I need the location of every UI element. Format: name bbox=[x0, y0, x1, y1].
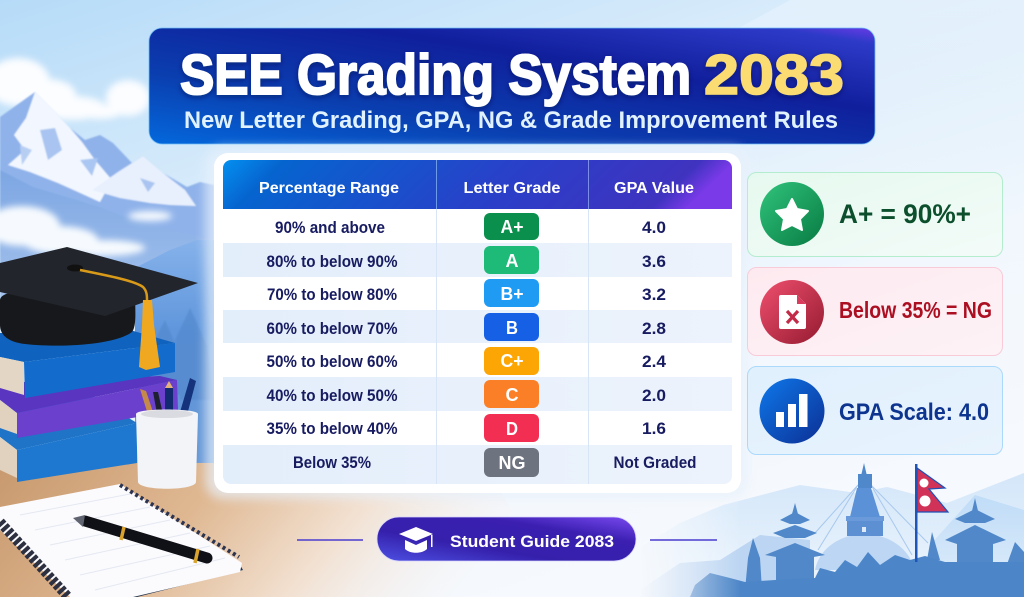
row: A+: 90% and above bbox=[275, 219, 385, 237]
row: B+ bbox=[267, 279, 666, 307]
title banner bbox=[149, 28, 875, 144]
callout: NG bbox=[748, 268, 1002, 356]
row: B: 60% to below 70% bbox=[266, 320, 398, 338]
icon: graduation cap bbox=[399, 527, 433, 553]
right pagoda bbox=[928, 498, 1024, 562]
row: A: A bbox=[506, 251, 518, 271]
row: A bbox=[266, 246, 666, 274]
row: A: 80% to below 90% bbox=[266, 253, 398, 271]
footer badge: Student Guide: Student Guide 2083 bbox=[450, 532, 614, 551]
callout: A+: A+ = 90%+ bbox=[839, 199, 971, 229]
table header: Letter Grade bbox=[464, 180, 561, 197]
row: C+: 50% to below 60% bbox=[266, 353, 398, 371]
row: C+: 2.4 bbox=[642, 353, 667, 371]
book: middle purple bbox=[0, 376, 178, 438]
icon: failed document bbox=[760, 280, 824, 344]
row: NG bbox=[293, 448, 696, 477]
row: NG: Below 35% bbox=[293, 454, 371, 472]
row: C+ bbox=[266, 347, 667, 375]
callout: GPA scale bbox=[748, 366, 1002, 454]
background light diagonal bbox=[735, 0, 1024, 200]
book: bottom blue bbox=[0, 395, 137, 482]
notebook and pen bbox=[0, 484, 243, 597]
row: C: 2.0 bbox=[642, 387, 666, 405]
icon: bar chart bbox=[760, 378, 824, 444]
row: D: 1.6 bbox=[642, 420, 666, 438]
row: A+: A+ bbox=[500, 217, 524, 237]
row: B+: 3.2 bbox=[642, 286, 666, 304]
row: C bbox=[266, 380, 666, 408]
scene: himalayan mountains and clouds bbox=[0, 58, 214, 470]
row: C: C bbox=[506, 385, 518, 405]
left pagoda bbox=[746, 503, 825, 582]
row: A+ bbox=[275, 213, 666, 240]
table header bbox=[223, 160, 732, 209]
icon: star bbox=[760, 182, 824, 246]
row: B+: 70% to below 80% bbox=[267, 286, 397, 304]
row: D: 35% to below 40% bbox=[266, 420, 398, 438]
row: A: 3.6 bbox=[642, 253, 666, 271]
spiral binding bbox=[120, 485, 239, 557]
row: C: 40% to below 50% bbox=[266, 387, 398, 405]
row: D: D bbox=[506, 419, 518, 439]
callout: GPA scale: GPA Scale: 4.0 bbox=[839, 399, 989, 426]
stack of books bbox=[0, 330, 178, 482]
table header: GPA Value bbox=[614, 180, 694, 197]
wooden desk bbox=[0, 462, 560, 597]
graduation cap bbox=[0, 247, 198, 370]
pencil cup bbox=[136, 378, 198, 489]
table header: Percentage Range bbox=[259, 180, 399, 197]
panel: grading table bbox=[205, 147, 749, 499]
title: SEE Grading System bbox=[180, 43, 691, 107]
row: C+: C+ bbox=[500, 351, 524, 371]
row: NG: NG bbox=[498, 453, 526, 473]
footer badge: Student Guide bbox=[297, 517, 717, 561]
pen bbox=[73, 515, 207, 563]
row: B bbox=[266, 313, 666, 341]
callout: NG: Below 35% = NG bbox=[839, 297, 992, 323]
row: D bbox=[266, 414, 666, 442]
row: B+: B+ bbox=[500, 284, 524, 304]
row: A+: 4.0 bbox=[642, 219, 666, 237]
row: B: B bbox=[506, 318, 518, 338]
stupa bbox=[815, 463, 928, 570]
row: B: 2.8 bbox=[642, 320, 666, 338]
callout: A+ bbox=[748, 172, 1002, 256]
Nepal flag bbox=[915, 464, 948, 562]
row: NG: Not Graded bbox=[614, 454, 696, 472]
title year: 2083 bbox=[704, 43, 844, 107]
skyline: Kathmandu temples and Nepal flag bbox=[620, 463, 1024, 597]
tassel bbox=[139, 300, 160, 370]
book: top blue bbox=[0, 330, 175, 398]
skyline base bbox=[690, 552, 1024, 597]
subtitle: New Letter Grading, GPA, NG & Grade Improvement Rules bbox=[184, 107, 838, 134]
